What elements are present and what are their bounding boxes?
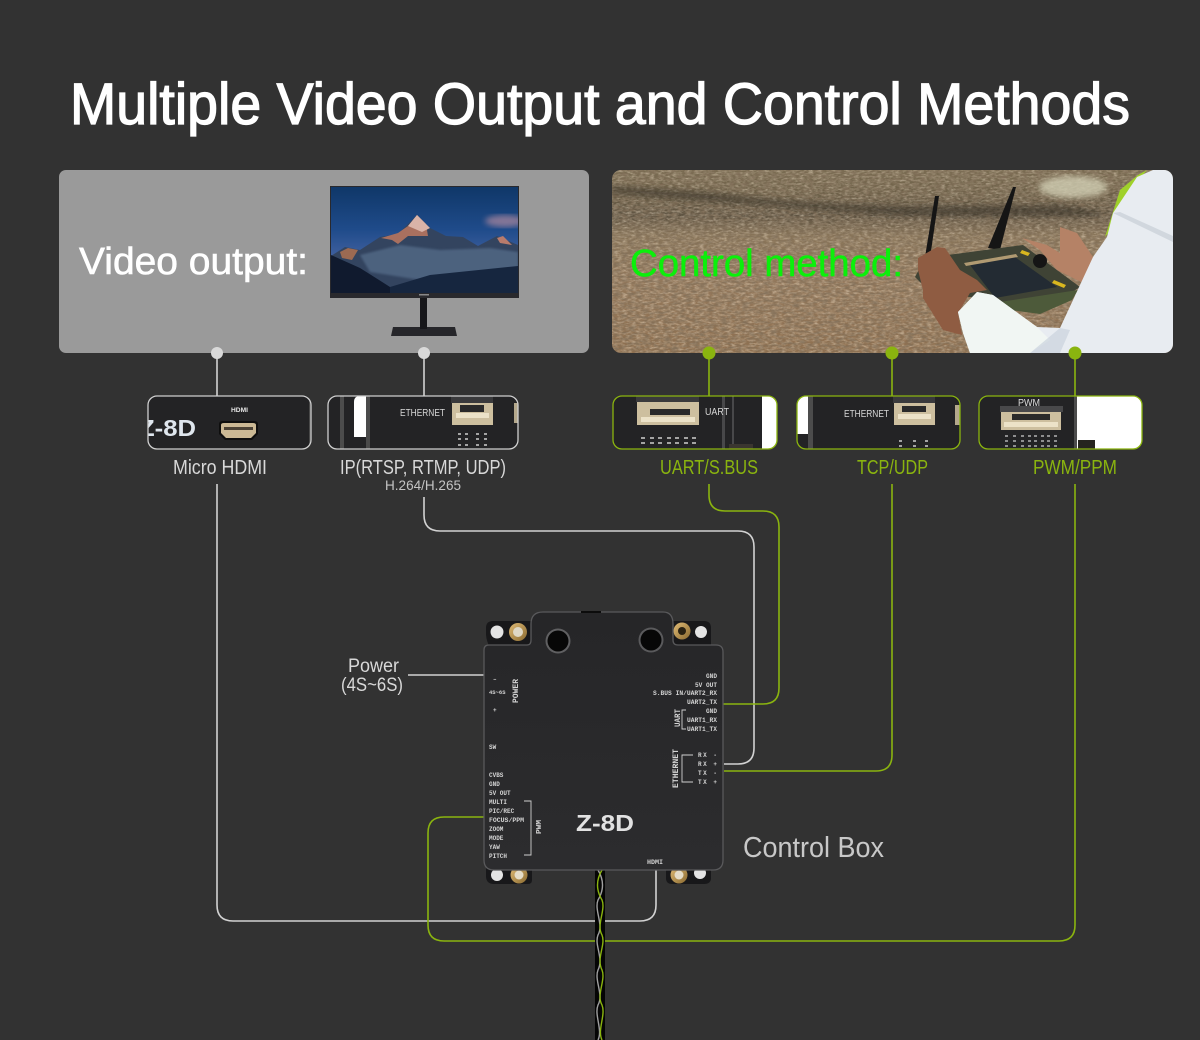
power pin labels: + (493, 707, 497, 714)
power pin labels: 4S~6S (489, 689, 506, 696)
label: PWM/PPM: PWM/PPM (1033, 457, 1117, 479)
port thumbnail: micro HDMI: HDMI (231, 407, 248, 414)
port thumbnail: UART (613, 396, 777, 449)
icon: antennas (925, 187, 1016, 258)
port thumbnail: UART: UART (705, 407, 729, 418)
icon: hands (918, 227, 1093, 335)
label: codecs: H.264/H.265 (385, 477, 461, 493)
port thumbnail: PWM: PWM (1018, 398, 1040, 409)
left pin labels: PIC/REC (489, 808, 515, 815)
label: control box: Control Box (743, 832, 884, 864)
pwm bracket: PWM (536, 820, 544, 834)
cable (595, 868, 605, 1040)
ethernet pin labels: RX - (698, 752, 717, 759)
left pin labels: 5V OUT (489, 790, 511, 797)
heading: control method: Control method: (630, 243, 903, 285)
heading: video output: Video output: (79, 241, 308, 283)
left pin labels: YAW (489, 844, 500, 851)
hdmi label: HDMI (647, 859, 663, 866)
left pin labels: ZOOM (489, 826, 504, 833)
enclosure body (484, 612, 723, 870)
label: power: (4S~6S) (341, 675, 403, 696)
connector lines: green (428, 352, 1075, 941)
uart bracket (674, 709, 686, 729)
uart pin labels: UART1_RX (687, 717, 717, 724)
uart pin labels (653, 673, 717, 733)
port thumbnail: ethernet IP: ETHERNET (400, 408, 445, 419)
uart pin labels: UART1_TX (687, 726, 717, 733)
left pin labels: GND (489, 781, 500, 788)
model name: Z-8D (576, 810, 634, 836)
icon: hi-vis strap (1105, 170, 1147, 237)
left pin labels (489, 772, 524, 860)
port thumbnail: micro HDMI: Z-8D (139, 415, 196, 441)
panel: control method photo (612, 170, 1173, 353)
left pin labels: PITCH (489, 853, 507, 860)
left pin labels: MODE (489, 835, 504, 842)
uart pin labels: UART2_TX (687, 699, 717, 706)
ethernet pin labels: TX - (698, 770, 717, 777)
uart pin labels: S.BUS IN/UART2_RX (653, 690, 717, 697)
label: Micro HDMI: Micro HDMI (173, 457, 267, 479)
connector lines: white (217, 352, 754, 921)
port thumbnail: micro HDMI (139, 396, 311, 449)
icon: remote controller (915, 245, 1080, 314)
ethernet pin labels: RX + (698, 761, 717, 768)
panel: video output (59, 170, 589, 353)
title: Multiple Video Output and Control Methods (70, 72, 1130, 137)
left pin labels: FOCUS/PPM (489, 817, 524, 824)
uart bracket: UART (674, 709, 683, 727)
top ears (486, 621, 711, 648)
power pin labels: SW (489, 744, 497, 751)
port thumbnail: TCP: ETHERNET (844, 409, 889, 420)
port thumbnail: TCP (797, 396, 960, 449)
uart pin labels: GND (706, 708, 717, 715)
label: IP protocols: IP(RTSP, RTMP, UDP) (340, 457, 506, 479)
connector dots (211, 346, 1082, 360)
icon: white jacket (958, 170, 1173, 353)
port thumbnail: ethernet IP (328, 396, 518, 449)
ethernet pin labels: TX + (698, 779, 717, 786)
camera holes (546, 628, 664, 654)
label: power (341, 656, 403, 696)
left pin labels: MULTI (489, 799, 507, 806)
port thumbnail: PWM (979, 396, 1142, 449)
ethernet pin labels: ETHERNET (672, 749, 681, 788)
uart pin labels: 5V OUT (695, 682, 717, 689)
label: power: Power (348, 656, 400, 677)
pwm bracket (524, 801, 544, 855)
power pin labels: – (493, 676, 497, 683)
control box device (484, 611, 723, 884)
bottom ears (486, 866, 711, 884)
uart pin labels: GND (706, 673, 717, 680)
label: TCP/UDP: TCP/UDP (857, 457, 928, 479)
ethernet pin labels (672, 749, 717, 788)
label: UART/S.BUS: UART/S.BUS (660, 457, 758, 479)
power pin labels: POWER (512, 679, 521, 703)
left pin labels: CVBS (489, 772, 504, 779)
icon: monitor (330, 186, 525, 336)
power pin labels (489, 676, 521, 751)
